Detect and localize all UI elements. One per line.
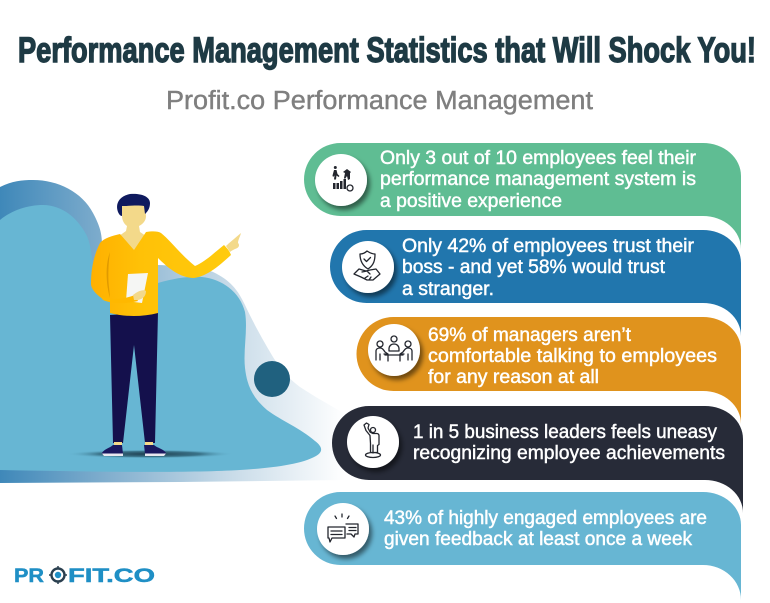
right shoe xyxy=(144,445,166,454)
back gradient blob xyxy=(0,180,345,483)
statistic text xyxy=(380,148,697,212)
logo: Profit.co xyxy=(14,565,155,587)
arm crease xyxy=(107,252,110,298)
statistic text: Only 3 out of 10 employees feel their xyxy=(380,148,697,169)
pointing hand xyxy=(226,233,241,252)
logo: Profit.co: PR xyxy=(14,565,44,587)
statistic text: 43% of highly engaged employees are xyxy=(384,508,707,529)
statistic text xyxy=(428,325,717,388)
legs xyxy=(110,312,158,443)
left shoe xyxy=(102,445,123,454)
front light blue blob xyxy=(0,205,321,472)
icon: meeting people xyxy=(368,324,420,376)
banner 5: light blue xyxy=(304,492,741,600)
subtitle: Profit.co Performance Management xyxy=(166,87,593,115)
statistic text: a stranger. xyxy=(402,279,494,300)
banner 3: orange xyxy=(357,317,741,424)
neck and face xyxy=(119,205,146,252)
icon: speech bubbles xyxy=(317,503,369,555)
statistic text: 1 in 5 business leaders feels uneasy xyxy=(413,422,717,443)
ankles xyxy=(114,442,153,447)
shoe soles xyxy=(102,454,166,456)
logo target mark xyxy=(49,566,67,584)
sheet of paper xyxy=(126,273,148,303)
statistic text: a positive experience xyxy=(380,191,562,212)
ground shadow xyxy=(66,450,234,458)
hair xyxy=(117,194,150,216)
statistic text: given feedback at least once a week xyxy=(384,529,693,550)
statistic text: Only 42% of employees trust their xyxy=(402,236,695,257)
icon: growth chart and gear xyxy=(315,154,367,206)
icon: leader statue with trophy xyxy=(347,416,399,468)
presenter figure xyxy=(91,194,241,456)
statistic text: performance management system is xyxy=(380,169,696,190)
statistic text: for any reason at all xyxy=(428,367,599,388)
statistic text: comfortable talking to employees xyxy=(428,346,717,367)
statistic text xyxy=(402,236,695,300)
holding hand xyxy=(133,290,146,300)
banner 2: blue xyxy=(330,230,741,336)
statistic text xyxy=(384,508,707,550)
banner 1: green xyxy=(304,143,741,249)
statistic text: recognizing employee achievements xyxy=(413,443,725,464)
icon: shield and handshake xyxy=(342,241,394,293)
statistic text: boss - and yet 58% would trust xyxy=(402,257,666,278)
logo: Profit.co: FIT.CO xyxy=(68,565,155,587)
statistic text: 69% of managers aren’t xyxy=(428,325,632,346)
dark teal circle xyxy=(254,361,290,397)
banner 4: dark navy xyxy=(332,406,743,513)
forearm xyxy=(100,295,138,303)
illustration: presenter on blue blobs xyxy=(0,180,345,483)
sweater xyxy=(91,231,231,316)
statistic text xyxy=(413,422,725,464)
